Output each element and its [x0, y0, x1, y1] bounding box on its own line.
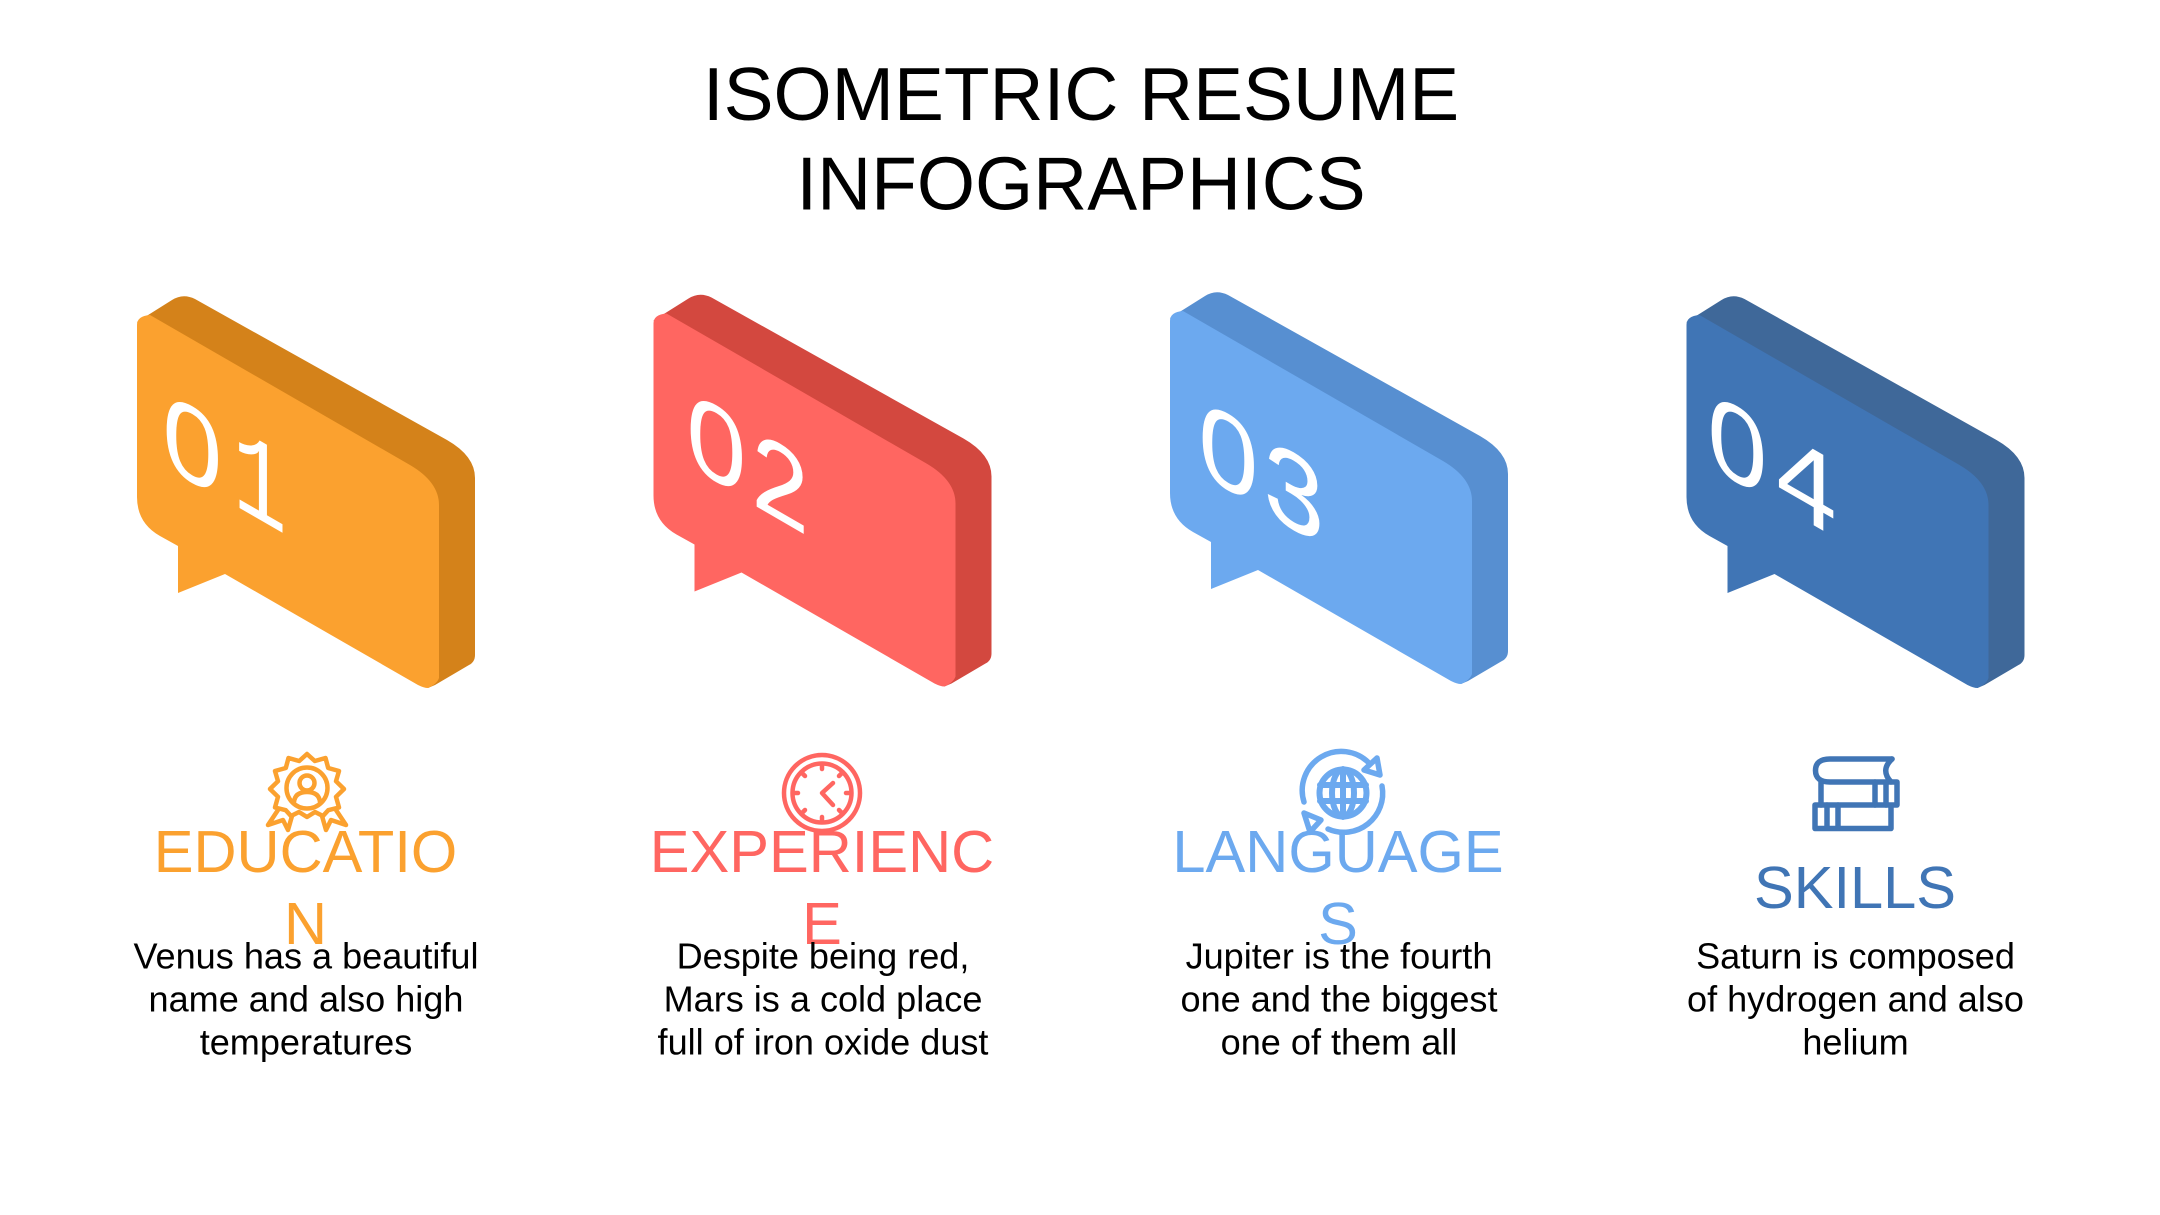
icon: rotating globe [1302, 751, 1383, 832]
panel: bubble 03 [1170, 292, 1508, 684]
panel: bubble 03: 0 [1198, 374, 1258, 530]
text: skills description: of hydrogen and also [1687, 978, 2024, 1020]
panel: bubble 04: 4 [1774, 407, 1839, 575]
icon: stack of books [1815, 759, 1897, 828]
title [703, 52, 1459, 226]
panel: bubble 02: 0 [686, 366, 746, 522]
text: education description: Venus has a beautiful [133, 936, 479, 976]
text: languages description: one and the biggest [1181, 978, 1497, 1020]
heading: EXPERIENCE: EXPERIENC [650, 818, 994, 885]
text: experience description [658, 936, 988, 1062]
text: languages description: one of them all [1221, 1022, 1457, 1062]
text: skills description: Saturn is composed [1696, 936, 2015, 976]
text: languages description [1181, 936, 1497, 1062]
title: INFOGRAPHICS [796, 142, 1366, 226]
text: experience description: full of iron oxide dust [658, 1022, 988, 1062]
text: education description: name and also high [149, 978, 463, 1020]
panel: bubble 02 [654, 295, 992, 686]
heading: EDUCATION: N [284, 890, 327, 957]
text: skills description [1687, 936, 2024, 1062]
heading: LANGUAGES: S [1318, 890, 1358, 957]
panel: bubble 03: 3 [1261, 416, 1326, 584]
heading: EXPERIENCE [650, 818, 994, 957]
icon: award badge [268, 754, 346, 830]
text: experience description: Despite being red, [677, 936, 969, 976]
heading: LANGUAGES [1172, 818, 1504, 957]
panel: bubble 01: 0 [162, 367, 222, 523]
panel: bubble 04 [1686, 296, 2024, 688]
icon: clock [784, 755, 860, 831]
text: skills description: helium [1802, 1022, 1909, 1062]
text: education description [133, 936, 479, 1062]
panel: bubble 04: 0 [1708, 367, 1767, 523]
heading: EDUCATION [154, 818, 457, 957]
panel: bubble 01: 1 [233, 404, 287, 572]
panel: bubble 02: 2 [750, 407, 811, 572]
text: experience description: Mars is a cold place [664, 978, 982, 1020]
heading: EXPERIENCE: E [802, 890, 842, 957]
title: ISOMETRIC RESUME [703, 52, 1459, 136]
text: education description: temperatures [200, 1022, 412, 1062]
panel: bubble 01 [137, 296, 475, 688]
heading: SKILLS: SKILLS [1754, 854, 1956, 921]
heading: LANGUAGES: LANGUAGE [1172, 818, 1504, 885]
heading: EDUCATION: EDUCATIO [154, 818, 457, 885]
text: languages description: Jupiter is the fourth [1186, 936, 1492, 976]
